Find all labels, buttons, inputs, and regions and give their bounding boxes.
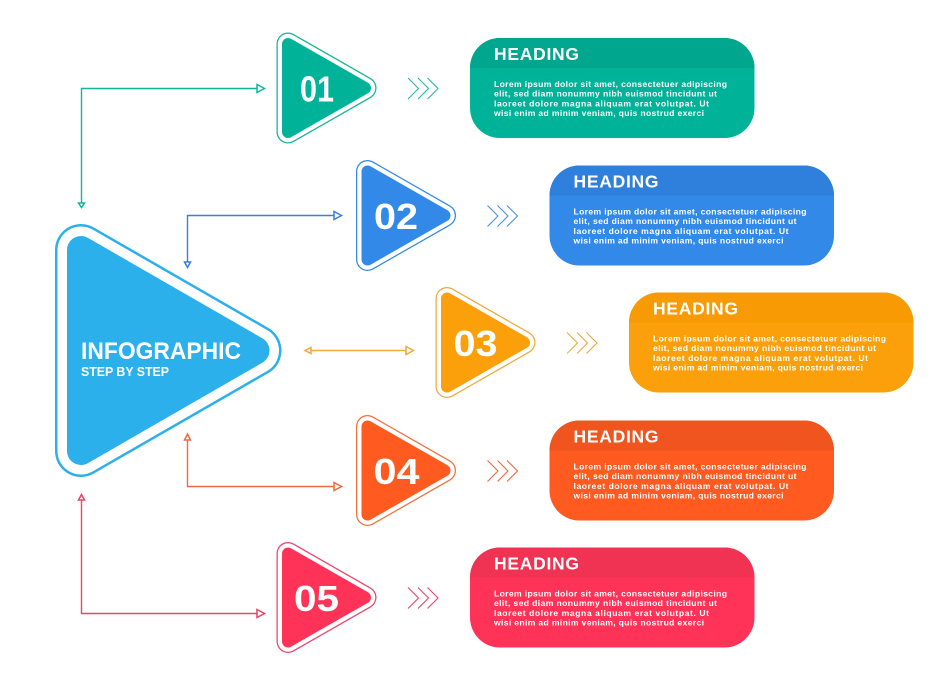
card 3: [629, 292, 914, 392]
card 2: HEADING: [574, 172, 658, 192]
triangle 03: 03: [454, 323, 498, 364]
arrow: main to step 4: [184, 434, 342, 490]
card 3: HEADING: [653, 298, 738, 318]
card 4: laoreet dolore magna aliquam erat volutpat. Ut: [574, 481, 789, 491]
triangle 01: 01: [300, 68, 334, 110]
triangle 04: [368, 426, 444, 514]
triangle 02: [368, 172, 444, 260]
chevrons 1: [408, 78, 438, 99]
card 2: wisi enim ad minim veniam, quis nostrud exerci: [572, 236, 784, 246]
card 5: HEADING: [494, 554, 579, 574]
step 2 group: [368, 166, 834, 266]
card 5: wisi enim ad minim veniam, quis nostrud exerci: [493, 618, 704, 628]
card 2: elit, sed diam nonummy nibh euismod tincidunt ut: [574, 216, 797, 226]
card 5: [470, 548, 754, 648]
card 5: Lorem ipsum dolor sit amet, consectetuer adipiscing: [494, 588, 727, 598]
card 4: Lorem ipsum dolor sit amet, consectetuer adipiscing: [574, 462, 806, 472]
card 4: wisi enim ad minim veniam, quis nostrud exerci: [572, 490, 784, 500]
card 1: Lorem ipsum dolor sit amet, consectetuer adipiscing: [494, 79, 727, 89]
card 3: laoreet dolore magna aliquam erat volutpat. Ut: [653, 353, 868, 363]
triangle 05: 05: [294, 578, 339, 619]
chevrons 2: [488, 206, 518, 226]
card 1: HEADING: [494, 44, 579, 64]
main triangle: infographic step by step: [81, 250, 256, 451]
card 3: elit, sed diam nonummy nibh euismod tincidunt ut: [653, 343, 876, 353]
card 2: [550, 166, 834, 266]
main subtitle: STEP BY STEP: [81, 365, 169, 379]
triangle 05: [288, 554, 365, 642]
arrow: main to step 2: [184, 212, 342, 268]
card 2: Lorem ipsum dolor sit amet, consectetuer adipiscing: [574, 206, 806, 216]
card 3: Lorem ipsum dolor sit amet, consectetuer adipiscing: [653, 334, 886, 344]
triangle 01: [288, 44, 365, 132]
step 1 group: [288, 38, 754, 138]
card 1: [470, 38, 754, 138]
card 1: laoreet dolore magna aliquam erat volutpat. Ut: [494, 98, 709, 108]
arrow: main to step 5: [78, 494, 264, 618]
card 4: HEADING: [574, 426, 658, 446]
card 1: elit, sed diam nonummy nibh euismod tincidunt ut: [494, 88, 717, 98]
card 2: laoreet dolore magna aliquam erat volutpat. Ut: [574, 226, 789, 236]
arrow: main to step 3: [305, 346, 414, 354]
main title: INFOGRAPHIC: [81, 338, 241, 365]
step 3 group: [447, 292, 914, 392]
chevrons 5: [408, 588, 438, 608]
card 3: wisi enim ad minim veniam, quis nostrud exerci: [652, 362, 863, 372]
card 4: elit, sed diam nonummy nibh euismod tincidunt ut: [574, 471, 797, 481]
step 5 group: [288, 548, 754, 648]
step 4 group: [368, 420, 834, 520]
card 4: [550, 420, 834, 520]
card 5: laoreet dolore magna aliquam erat volutpat. Ut: [494, 608, 709, 618]
triangle 02: 02: [374, 196, 418, 237]
chevrons 4: [488, 460, 518, 482]
arrow: main to step 1: [78, 84, 264, 208]
triangle 03: [447, 298, 524, 386]
triangle 04: 04: [374, 451, 420, 492]
card 5: elit, sed diam nonummy nibh euismod tincidunt ut: [494, 598, 717, 608]
card 1: wisi enim ad minim veniam, quis nostrud exerci: [493, 108, 704, 118]
chevrons 3: [567, 332, 597, 354]
